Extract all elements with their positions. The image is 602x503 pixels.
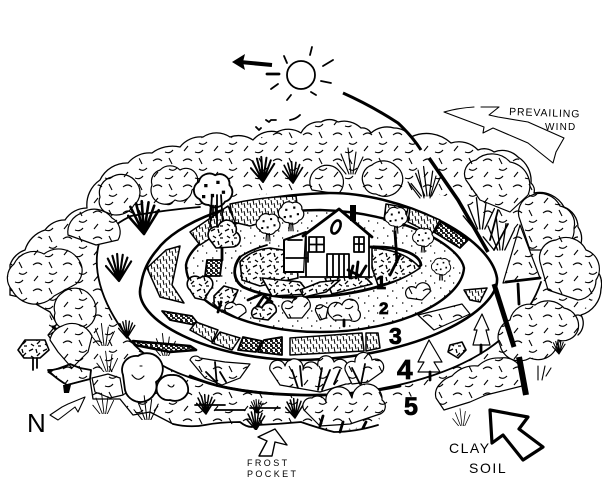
hedge [303,384,385,426]
window right [354,237,364,252]
label: N: N [27,408,46,438]
tuft: left of ring [106,254,131,281]
bush: left shoulder [99,174,140,215]
tuft: rear [251,157,274,182]
bush: right 2 [540,238,599,300]
fruit tree: right 1 [385,207,407,234]
veg patch: front left [262,278,310,296]
tuft: grass group lower left [92,323,114,346]
arrow: prevailing wind [444,107,564,163]
shrub 10 [300,280,340,297]
bed: lower right [418,304,470,330]
label: clay soil: SOIL [469,460,507,476]
bush: right 3 [498,301,579,361]
bush: lower left 2 [92,374,123,398]
label: prevailing wind: PREVAILING [509,106,581,120]
tuft: right [463,198,494,229]
label: frost pocket [247,458,298,479]
shrub 9 [406,283,430,300]
solar arc [343,93,526,395]
shrub 4 [252,303,276,320]
fruit tree: right 3 [431,258,451,281]
garage door [327,254,349,277]
fruit tree: left zone 2 [208,220,240,248]
fruit tree: top middle [278,202,304,231]
tuft: rear light [337,148,363,174]
tuft: upper left dark [128,201,159,234]
house [284,205,372,278]
tree canopy: perimeter zone 5 [10,120,602,432]
stipple ground: zone 2 [186,210,464,332]
tuft: bottom 3 [250,399,263,413]
fruit tree: big upper left [194,174,232,218]
label: frost pocket: FROST [247,458,290,468]
label: prevailing wind: WIND [545,122,576,133]
porch [286,240,308,262]
tuft: right 2 [483,219,514,250]
attic window [329,219,343,235]
sun [267,47,333,100]
bed: top hatched [230,196,298,226]
bush: left 1 [7,249,82,304]
shrub 8 [328,299,360,321]
zone 3 ring [140,193,497,360]
bed: bottom 6 [366,333,380,351]
back trees and shrubs [7,154,599,410]
bed: top second [190,206,235,245]
birds [256,115,300,130]
tuft: lower left [119,321,135,338]
bush: right 1 [518,194,575,250]
tuft: bottom 4 [286,399,304,418]
tree: upper left [151,166,198,204]
bed: bottom 3 [212,332,240,350]
ground lines [195,405,280,410]
bush: rear right [465,154,530,212]
bush: rear centre right [362,161,403,196]
zone 3 beds [147,196,487,355]
zone 2 ring [186,210,464,332]
zone numbers [376,273,418,421]
zone 1 inner ring and beds [235,232,421,297]
zone 2 plants [187,260,430,326]
number 4: 4 [397,354,413,385]
north arrow [50,397,85,420]
sun rays [271,47,333,100]
shrub group right [345,352,384,384]
zone 4 ground: outer ring [97,190,541,395]
tuft: right lower [552,340,565,354]
arrow: frost pocket [258,429,287,456]
bed: upper right 3 [434,222,468,248]
shrub [187,276,213,300]
tuft: rear 2 [283,162,303,183]
grass tufts [92,148,565,430]
bed: bottom 2 [190,322,218,342]
veg patch: front centre [325,272,372,294]
bush: left lower [50,324,92,368]
number 2: 2 [379,299,388,318]
fruit tree: trunk hatch [210,195,223,227]
log [133,341,196,352]
label: prevailing wind [509,106,581,133]
zone 3 fruit trees [194,174,451,281]
label: clay soil [449,440,507,476]
bed: upper right 1 [384,204,408,226]
bush: lower left [48,364,91,385]
shrub group centre [270,356,355,392]
bed: upper right 2 [408,208,440,234]
shrub at door [348,262,366,278]
bed: bottom 5 dark [258,337,282,355]
veg patch: right [372,248,420,285]
bed: left [147,246,184,303]
window left [309,237,324,252]
shrub 3 [225,302,246,318]
house walls [304,210,370,278]
hedge base [320,416,366,432]
bed: right small [464,288,487,302]
bush: round front 1 [122,353,163,402]
tuft: rear right [411,167,441,196]
bush: rear centre [310,165,343,194]
tuft: grass 3 [97,351,118,372]
shrub group left [190,356,250,385]
plant dark [248,294,272,308]
bush: bottom right near clay [435,358,522,410]
shrub [448,342,466,358]
shrub 2 [214,286,238,312]
tuft: grass beside log [153,333,175,356]
fruit tree: right 2 [413,228,434,253]
inner ring [235,247,421,297]
fruit tree: top 2 [256,214,280,241]
chimney [350,205,356,221]
conifer 1 [418,340,442,372]
wall lines [300,236,372,278]
label: clay soil: CLAY [449,440,491,456]
number 1: 1 [376,273,386,293]
bed: bottom 1 dark [162,311,200,326]
arrow: clay soil [490,410,543,460]
bush: small stump [18,340,49,358]
bush: left round [54,288,96,331]
veg patch: left [240,248,298,286]
conifer right [503,225,540,283]
bed: bottom 4 dark [238,337,262,352]
shrub 7 [315,305,328,320]
zone 5 front hedge [195,384,385,432]
greenhouse [284,232,306,272]
arrow: sun direction [232,54,272,70]
zone 4 trees [133,225,540,392]
tuft: grass near clay [453,409,470,426]
conifer 2 [473,314,490,345]
bush: left shoulder low [68,209,120,245]
label: frost pocket: POCKET [247,469,298,479]
shrub 6 [282,296,310,318]
tuft: grass bottom left [134,396,158,420]
roof [303,209,372,237]
bush: round front 2 [157,375,188,401]
sun disc [287,61,315,89]
ladder trellis [205,260,222,276]
bed: long bottom [290,333,364,355]
number 3: 3 [389,323,402,349]
number 5: 5 [404,393,418,421]
tuft: bottom 2 [247,411,265,430]
tuft: bottom 1 [197,395,215,414]
